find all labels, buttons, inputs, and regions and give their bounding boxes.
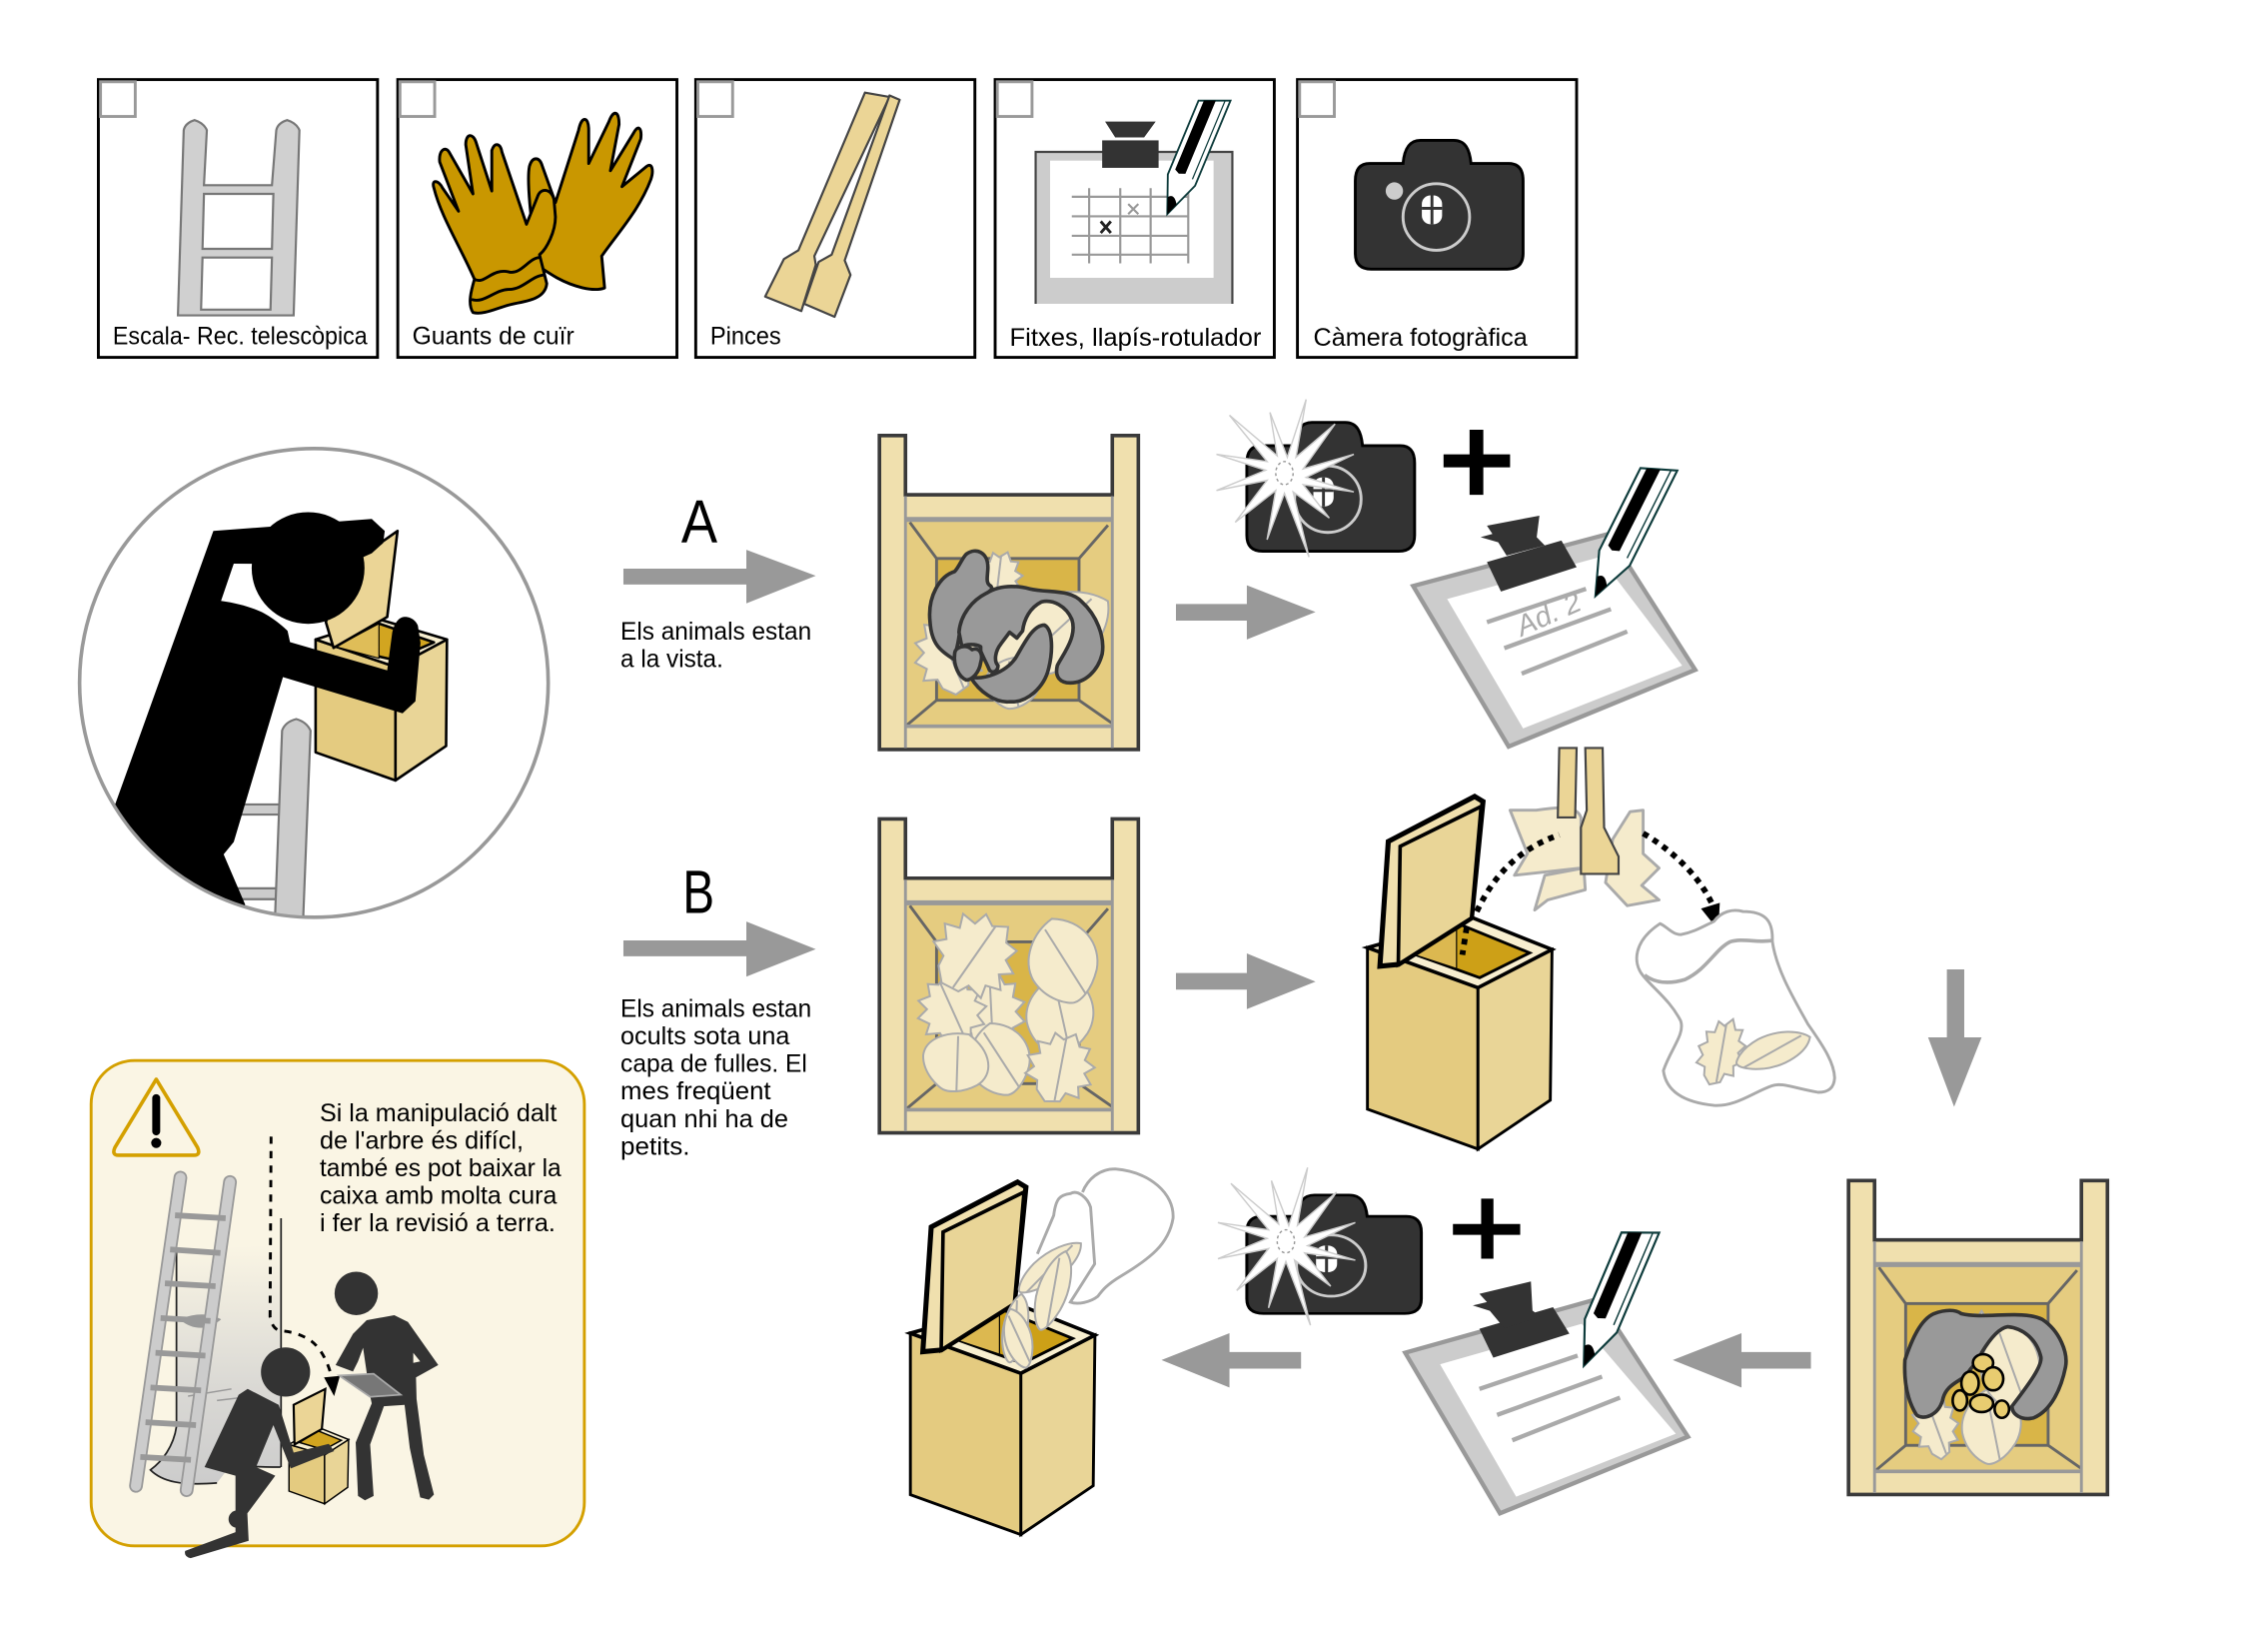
closing nest box with bag and leaves [910,1169,1173,1535]
plus sign A [1444,430,1510,495]
nest box with dormouse and babies [1848,1180,2107,1494]
icon: telescopic ladder [178,120,300,316]
person silhouette [115,512,421,940]
tool card: record sheets and pen: Fitxes, llapís-rotulador [1009,325,1261,352]
standing person with clipboard [335,1272,439,1500]
icon: tweezers [765,93,899,317]
text: handling advice: i fer la revisió a terra. [320,1210,556,1237]
tool card: gloves [398,80,677,358]
text: animals hidden under leaves: mes freqüent [620,1078,771,1105]
dormouse 1 [929,551,992,660]
text: handling advice: Si la manipulació dalt [320,1100,558,1127]
nest box in circle [316,531,447,781]
icon: camera [1355,140,1523,269]
ladder leaning on tree [136,1177,230,1490]
text: animals in view: a la vista. [620,646,723,673]
circle: person on ladder inspecting box [80,449,549,940]
text: animals in view [620,619,811,673]
arrow down [1928,969,1981,1106]
text: animals hidden under leaves: capa de fulles. El [620,1051,807,1078]
text: animals hidden under leaves [620,996,811,1160]
clipboard with blank lines [1405,1219,1688,1513]
icon: leather gloves [434,113,652,313]
arrow left to closing box [1162,1333,1301,1387]
arrow to camera and notes A [1176,586,1316,640]
callout panel: lowering the box [91,1060,584,1558]
tool card: ladder: Escala- Rec. telescòpica [113,324,368,351]
arrow to open box [1176,953,1316,1009]
text: animals in view: Els animals estan [620,619,811,646]
nest box A with two dormice [879,436,1138,750]
text: handling advice [320,1100,562,1237]
camera with flash A [1217,400,1415,557]
small open box [289,1389,349,1504]
dormouse 2 [954,587,1103,702]
text: animals hidden under leaves: Els animals estan [620,996,811,1023]
dashed arrow lowering box [270,1136,340,1396]
heading B: B [682,857,714,925]
icon: clipboard with grid [1036,89,1232,304]
tweezers lifting leaves [1510,748,1660,910]
text: handling advice: també es pot baixar la [320,1155,562,1182]
open nest box [1368,797,1552,1149]
tool card: gloves: Guants de cuïr [413,324,574,351]
clipboard with Ad. 2 note: Ad. 2 [1510,587,1587,644]
crouching person [185,1347,334,1558]
tool card: tweezers: Pinces [710,324,781,351]
adult dormouse [1904,1310,2066,1418]
icon: warning triangle [114,1079,199,1155]
tool card: record sheets and pen [995,80,1274,358]
camera with flash bottom [1218,1167,1422,1325]
dotted arrow from box to bag [1463,833,1719,954]
babies [1952,1354,2009,1418]
text: handling advice: de l'arbre és difícl, [320,1127,524,1154]
bag with leaves [1637,910,1834,1105]
clipboard with Ad. 2 note [1413,456,1696,747]
arrow left to clipboard [1673,1333,1811,1387]
arrow B [623,921,816,976]
arrow A [623,550,816,604]
tool card: camera [1298,80,1577,358]
heading A: A [681,488,717,556]
plus sign bottom [1453,1198,1521,1258]
text: animals hidden under leaves: quan nhi ha de [620,1106,788,1133]
text: animals hidden under leaves: ocults sota una [620,1023,790,1050]
nest box B covered in leaves [879,818,1138,1133]
text: handling advice: caixa amb molta cura [320,1182,558,1209]
tool card: camera: Càmera fotogràfica [1314,325,1528,352]
tool card: tweezers [695,80,975,358]
text: animals hidden under leaves: petits. [620,1133,690,1160]
ladder in circle [217,720,311,926]
tool card: ladder [98,80,378,358]
tree trunk [151,1218,281,1484]
